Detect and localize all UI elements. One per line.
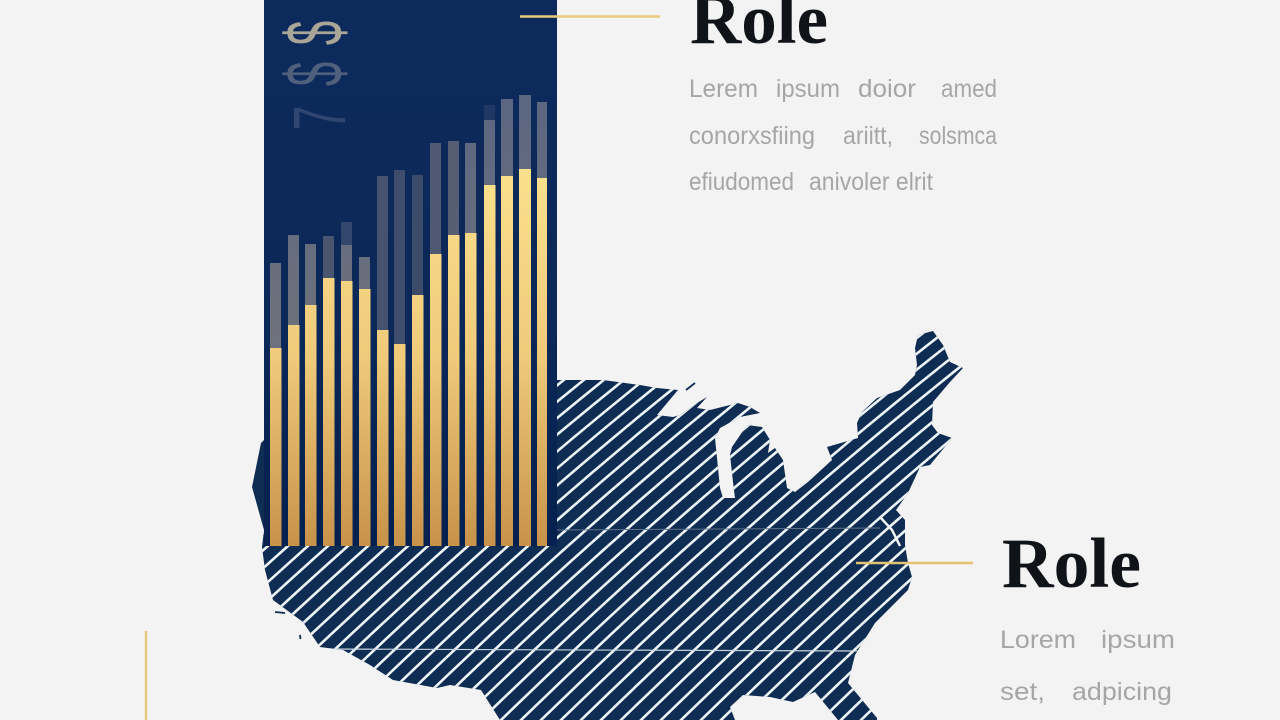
text block: lower role description: adpicing (1072, 678, 1172, 706)
text block: top role description: solsmca (919, 122, 997, 150)
icon: faded dollar sign, bright: $ (269, 21, 359, 45)
text block: lower role description: ipsum (1101, 626, 1175, 654)
text block: top role description: doior (858, 75, 916, 103)
icon: faded dollar sign, dim: $ (269, 62, 359, 86)
connector line: vertical accent (145, 631, 147, 720)
text block: top role description: ipsum (776, 75, 840, 103)
bar chart: gold bars (270, 169, 547, 546)
text block: top role description: amed (941, 75, 997, 103)
text block: lower role description (1000, 626, 1175, 706)
text block: top role description: anivoler elrit (809, 168, 933, 196)
bar chart: gray background bars (270, 95, 547, 363)
text block: top role description: efiudomed (689, 168, 794, 196)
panel: navy bar chart background (264, 0, 557, 546)
text block: top role description: ariitt, (843, 122, 893, 150)
text block: top role description: Lerem (689, 75, 758, 103)
text block: lower role description: set, (1000, 678, 1045, 706)
map of the United States with diagonal stripes (252, 331, 963, 720)
text block: top role description: conorxsfiing (689, 122, 815, 150)
faded rotated numeral: 7 (278, 106, 361, 130)
text block: top role description (689, 75, 997, 196)
connector line: top callout (520, 15, 660, 18)
connector line: lower callout (856, 562, 973, 564)
heading: lower role: Role (1002, 525, 1141, 603)
text block: lower role description: Lorem (1000, 626, 1076, 654)
